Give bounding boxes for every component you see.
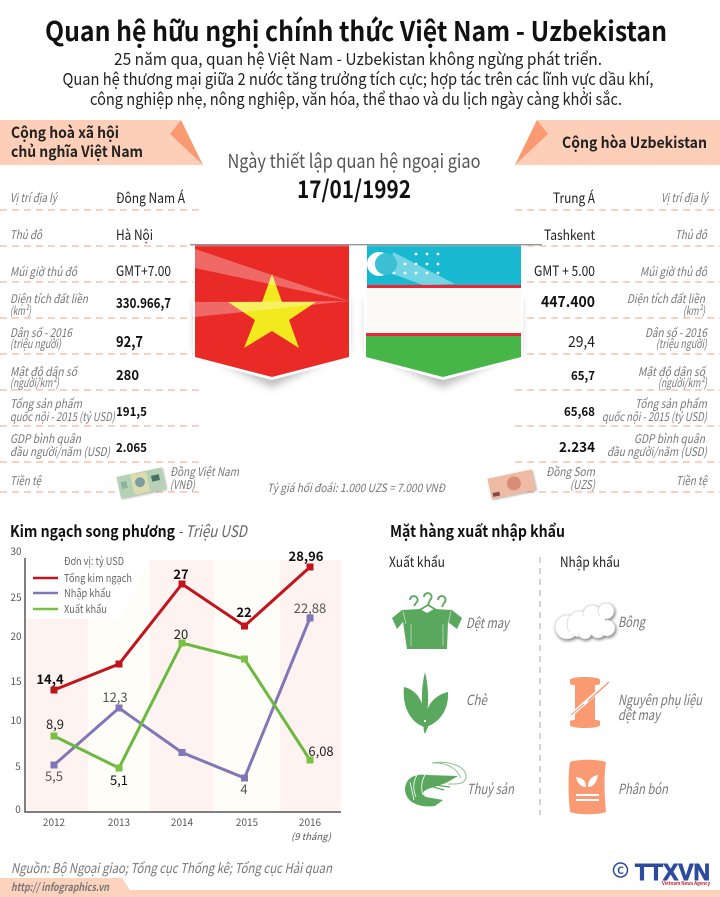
data labels: 22 — [236, 602, 252, 621]
Vietnam row labels: Dân số - 2016 — [10, 324, 73, 341]
Vietnam row values: GMT+7.00 — [116, 261, 171, 281]
Uzbekistan row labels: Dân số - 2016 — [645, 324, 708, 341]
y axis ticks: 30 — [10, 543, 22, 558]
Uzbekistan row values: 65,7 — [571, 365, 595, 384]
Vietnam row labels: quốc nội - 2015 (tỷ USD) — [10, 408, 116, 425]
diplomatic date heading: 17/01/1992 — [297, 170, 411, 205]
Vietnam row labels: Tiền tệ — [10, 472, 42, 489]
legend: Tổng kim ngạch — [64, 570, 132, 586]
Vietnam row labels: (triệu người) — [10, 335, 62, 352]
flag: Vietnam — [193, 245, 351, 388]
Uzbekistan row values: Tashkent — [544, 225, 596, 245]
icon: tea leaves — [404, 672, 448, 734]
Uzbekistan row values: 2.234 — [559, 437, 595, 457]
Vietnam row labels: Mật độ dân số — [10, 363, 79, 380]
legend: Xuất khẩu — [64, 601, 107, 617]
Vietnam row labels: Diện tích đất liền — [10, 290, 89, 307]
Uzbekistan row values: 447.400 — [541, 291, 595, 312]
Vietnam row labels: đầu người/năm (USD) — [10, 443, 111, 460]
column heading: import: Nhập khẩu — [560, 552, 620, 572]
x axis labels: (9 tháng) — [291, 829, 332, 843]
label: Chè: Chè — [466, 690, 488, 710]
TTXVN logo: Vietnam News Agency — [661, 880, 710, 887]
data labels: 12,3 — [102, 687, 128, 706]
currency: som — [546, 463, 596, 493]
exchange rate note: Tỷ giá hối đoái: 1.000 UZS = 7.000 VNĐ — [267, 480, 447, 496]
y axis ticks: 5 — [15, 758, 21, 773]
diplomatic date heading: Ngày thiết lập quan hệ ngoại giao — [228, 147, 480, 174]
icon: shirt — [392, 593, 462, 649]
data labels: 28,96 — [289, 546, 324, 565]
star — [228, 274, 316, 348]
Uzbekistan row labels: (km²) — [683, 302, 706, 319]
banner: Vietnam — [0, 120, 203, 165]
Uzbekistan row values: 29,4 — [568, 331, 595, 352]
y axis ticks: 0 — [15, 801, 21, 816]
icon: spool and needle — [570, 677, 611, 728]
Vietnam row labels: (người/km²) — [10, 374, 60, 391]
x axis labels — [43, 814, 332, 843]
data labels: 8,9 — [46, 714, 64, 733]
axes — [25, 558, 341, 812]
label: Phân bón: Phân bón — [618, 779, 669, 799]
data labels: 20 — [174, 624, 188, 643]
line: Tổng kim ngạch — [50, 564, 314, 694]
data labels: 22,88 — [294, 598, 326, 617]
y axis ticks: 20 — [10, 628, 22, 643]
footer bar: http:// infographics.vn — [11, 879, 110, 895]
TTXVN logo: TTXVN — [635, 859, 710, 885]
data labels — [36, 546, 334, 798]
x axis labels: 2016 — [299, 814, 322, 829]
goods heading: Mặt hàng xuất nhập khẩu — [390, 518, 565, 542]
source note: Nguồn: Bộ Ngoại giao; Tổng cục Thống kê; Tổng cục Hải quan — [11, 857, 333, 877]
Vietnam row values — [116, 188, 185, 456]
banner: Vietnam: Cộng hoà xã hội — [11, 121, 119, 143]
TTXVN logo: C — [617, 862, 624, 877]
Uzbekistan row labels: Tổng sản phẩm — [635, 395, 708, 412]
column heading: export: Xuất khẩu — [389, 552, 445, 572]
line chart — [10, 543, 341, 843]
Vietnam row labels: (km²) — [10, 302, 32, 319]
legend: Nhập khẩu — [64, 585, 111, 601]
column divider — [539, 557, 541, 815]
Uzbekistan row labels: Tiền tệ — [676, 472, 708, 489]
Vietnam row labels: Múi giờ thủ đô — [10, 263, 78, 280]
data labels: 4 — [240, 779, 248, 798]
currency: dong: Đồng Việt Nam — [170, 463, 240, 480]
Vietnam row values: Hà Nội — [116, 225, 153, 245]
label: Nguyên phụ liệu dệt may — [618, 690, 703, 725]
intro text: 25 năm qua, quan hệ Việt Nam - Uzbekistan không ngừng phát triển. — [114, 46, 602, 70]
Vietnam row labels: Tổng sản phẩm — [10, 395, 83, 412]
currency: dong — [170, 463, 240, 493]
icon: fertilizer bag — [568, 760, 606, 814]
icon: Vietnamese banknote — [116, 467, 166, 499]
data labels: 14,4 — [36, 669, 64, 688]
flag: Uzbekistan — [364, 245, 523, 388]
intro text: công nghiệp nhẹ, nông nghiệp, văn hóa, thể thao và du lịch ngày càng khởi sắc. — [90, 86, 622, 110]
Vietnam row values: 92,7 — [116, 331, 143, 352]
label: Dệt may: Dệt may — [466, 613, 511, 633]
line: Nhập khẩu — [50, 614, 314, 782]
x axis labels: 2014 — [171, 814, 194, 829]
Uzbekistan row labels: Múi giờ thủ đô — [640, 263, 708, 280]
chart heading: - Triệu USD — [178, 518, 249, 542]
intro text — [62, 46, 654, 110]
icon: cotton — [555, 603, 615, 639]
Uzbekistan row labels: GDP bình quân — [634, 430, 706, 447]
Vietnam row labels: Thủ đô — [10, 226, 43, 243]
legend: Đơn vị: tỷ USD — [64, 553, 124, 569]
title: Quan hệ hữu nghị chính thức Việt Nam - Uzbekistan — [45, 10, 667, 49]
Vietnam row labels: Vị trí địa lý — [10, 189, 58, 206]
Vietnam row labels — [10, 189, 116, 489]
x axis labels: 2012 — [43, 814, 66, 829]
label: Thuỷ sản: Thuỷ sản — [467, 779, 515, 799]
Vietnam row labels: GDP bình quân — [10, 430, 82, 447]
Uzbekistan row labels: Vị trí địa lý — [661, 189, 709, 206]
x axis labels: 2013 — [108, 814, 130, 829]
Vietnam row values: 280 — [116, 365, 139, 385]
table rows: dashed lines left — [0, 210, 203, 492]
y axis ticks: 10 — [10, 712, 22, 727]
line: Xuất khẩu — [50, 640, 314, 772]
currency: som: Đồng Som — [546, 463, 596, 480]
diplomatic date heading — [228, 147, 480, 205]
intro text: Quan hệ thương mại giữa 2 nước tăng trưởng tích cực; hợp tác trên các lĩnh vực dầu khí, — [62, 66, 654, 90]
Uzbekistan row labels: Thủ đô — [675, 226, 708, 243]
y axis ticks: 15 — [10, 673, 22, 688]
Uzbekistan row labels — [602, 189, 709, 489]
Uzbekistan row labels: Diện tích đất liền — [627, 290, 706, 307]
Uzbekistan row values — [534, 188, 596, 457]
chart bands — [27, 560, 341, 811]
data labels: 6,08 — [308, 741, 334, 760]
Vietnam row values: 330.966,7 — [116, 293, 171, 313]
flag top shadow band — [190, 244, 542, 247]
data labels: 5,1 — [110, 770, 128, 789]
x axis labels: 2015 — [236, 814, 259, 829]
label: Nguyên phụ liệu dệt may: dệt may — [618, 705, 662, 725]
label: Bông: Bông — [618, 612, 647, 632]
Uzbekistan row values: GMT + 5.00 — [534, 261, 595, 281]
table rows: dashed lines right — [515, 210, 720, 492]
banner: Vietnam: chủ nghĩa Việt Nam — [11, 140, 143, 162]
banner: Uzbekistan — [515, 120, 720, 165]
Uzbekistan row labels: Mật độ dân số — [638, 363, 707, 380]
y axis ticks — [10, 543, 22, 816]
data labels: 27 — [173, 564, 189, 583]
icon: Uzbek banknote — [487, 469, 536, 499]
Vietnam row values: Đông Nam Á — [116, 188, 185, 208]
crescent and stars — [367, 252, 439, 276]
data labels: 5,5 — [45, 766, 63, 785]
footer bar — [0, 878, 720, 897]
chart heading: Kim ngạch song phương — [10, 518, 175, 542]
currency: dong: (VNĐ) — [170, 476, 196, 493]
legend — [33, 553, 132, 617]
banner: Uzbekistan: Cộng hòa Uzbekistan — [562, 131, 707, 153]
currency: som: (UZS) — [570, 476, 596, 493]
Uzbekistan row values: 65,68 — [564, 401, 595, 420]
icon: shrimp — [405, 762, 466, 806]
y axis ticks: 25 — [10, 589, 22, 604]
Uzbekistan row values: Trung Á — [553, 188, 595, 208]
Vietnam row values: 191,5 — [116, 401, 147, 420]
Vietnam row values: 2.065 — [116, 437, 147, 456]
